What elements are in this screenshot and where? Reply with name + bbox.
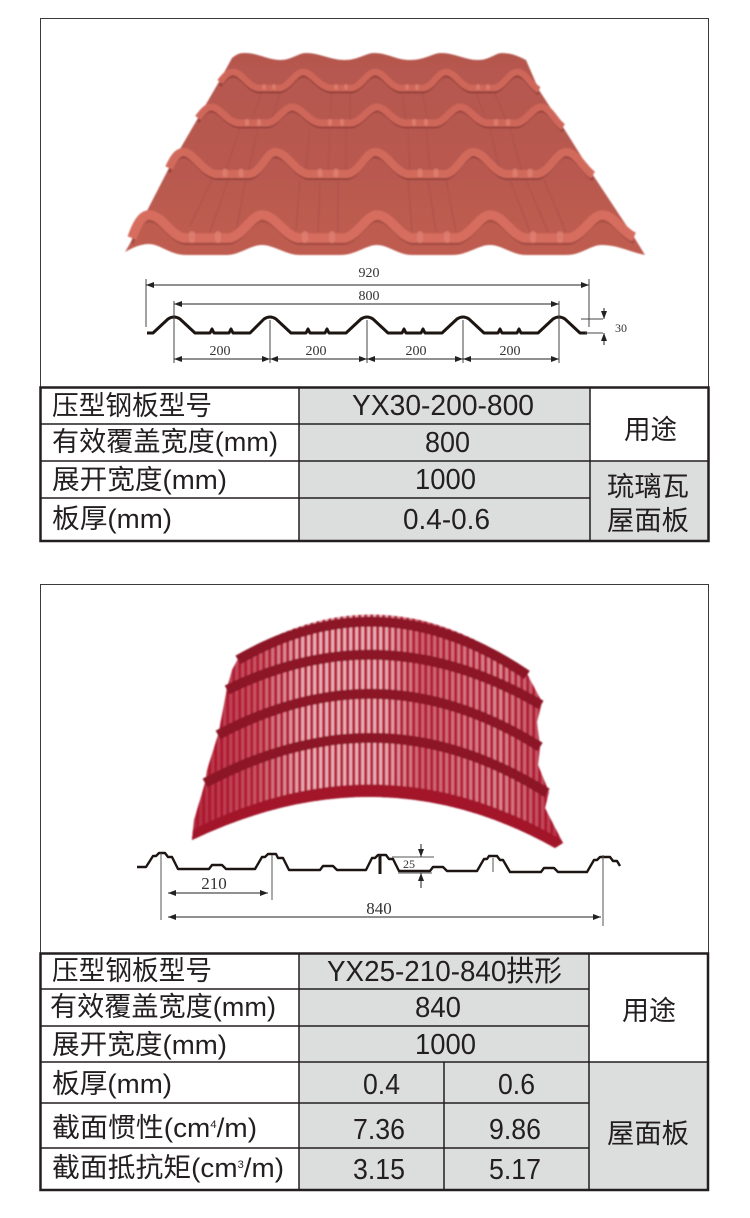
table: YX25-210-840 arched specifications: 9.86 <box>489 1114 541 1146</box>
diagram: tile sheet profile with dimensions: 800 <box>358 289 380 304</box>
table: YX25-210-840 arched specifications: 压型钢板型号 <box>52 956 212 986</box>
table: YX25-210-840 arched specifications: 展开宽度(mm) <box>52 1030 227 1060</box>
table: YX30-200-800 specifications: 压型钢板型号 <box>52 391 212 421</box>
table: YX25-210-840 arched specifications: 3.15 <box>353 1154 405 1186</box>
table: YX30-200-800 specifications: 屋面板 <box>607 506 689 536</box>
table: YX30-200-800 specifications: 用途 <box>624 415 677 445</box>
table: YX25-210-840 arched specifications: 板厚(mm) <box>52 1069 172 1099</box>
diagram: arched sheet profile with dimensions: 210 <box>201 874 227 893</box>
panel: arched roof sheet <box>40 584 708 954</box>
panel: glazed tile roof sheet <box>40 18 708 388</box>
table: YX25-210-840 arched specifications: 截面惯性(cm <box>52 1113 205 1143</box>
table: YX30-200-800 specifications: YX30-200-800 <box>352 390 534 422</box>
table: YX25-210-840 arched specifications: 3 <box>238 1159 244 1171</box>
diagram: tile sheet profile with dimensions: 200 <box>500 344 520 359</box>
diagram: tile sheet profile with dimensions: 200 <box>406 344 426 359</box>
table: YX25-210-840 arched specifications: 7.36 <box>353 1114 405 1146</box>
table: YX25-210-840 arched specifications: YX25-210-840拱形 <box>327 955 562 988</box>
table: YX25-210-840 arched specifications <box>40 953 708 1190</box>
table: YX30-200-800 specifications: 有效覆盖宽度(mm) <box>52 427 278 457</box>
image: red arched corrugated sheet <box>180 610 570 855</box>
table: YX25-210-840 arched specifications: 用途 <box>622 996 676 1026</box>
table: YX30-200-800 specifications: 展开宽度(mm) <box>52 465 227 495</box>
diagram: arched sheet profile with dimensions <box>137 844 620 926</box>
diagram: tile sheet profile with dimensions <box>146 266 627 363</box>
diagram: tile sheet profile with dimensions: 200 <box>210 344 230 359</box>
table: YX25-210-840 arched specifications: 840 <box>415 992 461 1024</box>
image: red glazed-tile steel sheet <box>125 53 645 255</box>
table: YX25-210-840 arched specifications: 有效覆盖宽度(mm) <box>50 992 276 1022</box>
table: YX25-210-840 arched specifications: /m) <box>244 1153 284 1183</box>
diagram: tile sheet profile with dimensions: 200 <box>306 344 326 359</box>
table: YX25-210-840 arched specifications: 4 <box>210 1119 217 1131</box>
table: YX25-210-840 arched specifications: 0.6 <box>498 1069 535 1101</box>
diagram: tile sheet profile with dimensions: 920 <box>358 266 380 281</box>
table: YX30-200-800 specifications: 800 <box>425 427 470 459</box>
table: YX30-200-800 specifications <box>40 387 709 541</box>
table: YX25-210-840 arched specifications: 屋面板 <box>607 1119 689 1149</box>
table: YX25-210-840 arched specifications: 5.17 <box>489 1154 541 1186</box>
table: YX25-210-840 arched specifications: /m) <box>217 1113 257 1143</box>
diagram: arched sheet profile with dimensions: 25 <box>403 857 415 871</box>
table: YX30-200-800 specifications: 板厚(mm) <box>52 504 172 534</box>
table: YX25-210-840 arched specifications: 1000 <box>415 1029 476 1061</box>
table: YX25-210-840 arched specifications: 截面抵抗矩(cm <box>52 1153 232 1183</box>
table: YX30-200-800 specifications: 琉璃瓦 <box>607 472 689 502</box>
table: YX30-200-800 specifications: 0.4-0.6 <box>403 504 490 536</box>
table: YX30-200-800 specifications: 1000 <box>415 464 476 496</box>
diagram: tile sheet profile with dimensions: 30 <box>615 321 627 335</box>
table: YX25-210-840 arched specifications: 0.4 <box>363 1069 400 1101</box>
diagram: arched sheet profile with dimensions: 840 <box>366 899 392 918</box>
